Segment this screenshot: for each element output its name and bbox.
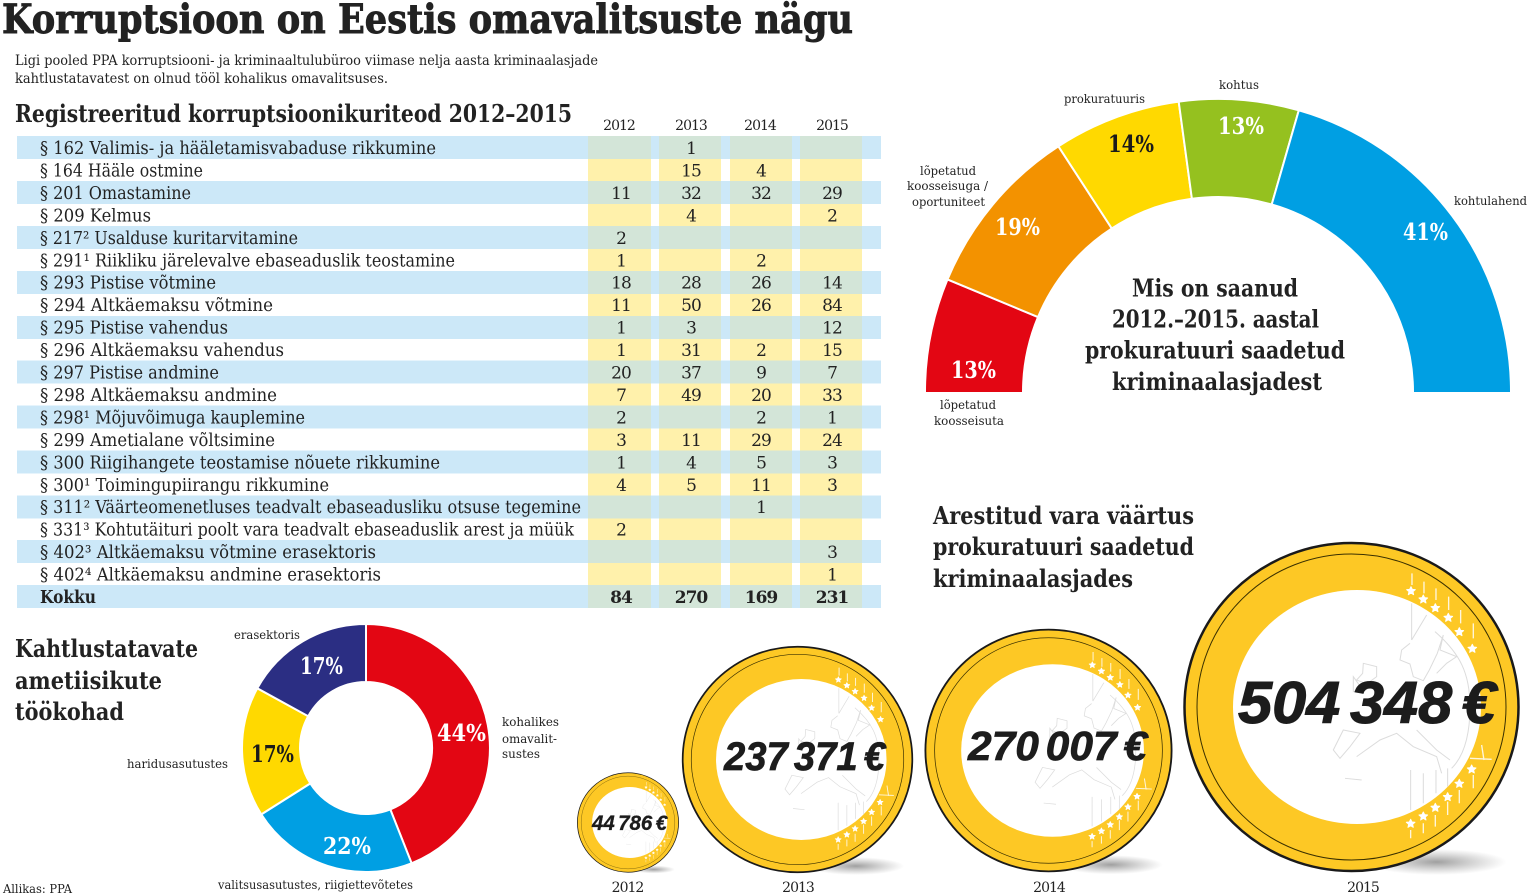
gauge centre heading bbox=[1085, 274, 1345, 396]
coin 2014: 270 007 € bbox=[967, 723, 1149, 769]
row 201: 32 bbox=[751, 184, 771, 204]
donut percentages: 17% bbox=[251, 741, 294, 768]
row 300: 4 bbox=[686, 453, 696, 473]
intro text: Ligi pooled PPA korruptsiooni- ja kriminaaltulubüroo viimase nelja aasta kriminaalasjade bbox=[15, 53, 598, 69]
row 297: 9 bbox=[756, 364, 766, 384]
row 299: 24 bbox=[822, 431, 842, 451]
row 402-4: 1 bbox=[827, 566, 837, 586]
row 300: 1 bbox=[616, 453, 626, 473]
gauge percentages: 13% bbox=[1218, 113, 1264, 140]
donut labels bbox=[127, 627, 559, 892]
coin 2013 bbox=[683, 647, 912, 894]
row 402-4 bbox=[40, 566, 837, 586]
row 293: 14 bbox=[822, 274, 842, 294]
row 402-3: 3 bbox=[827, 543, 837, 563]
row 209: 2 bbox=[827, 206, 837, 226]
row 298: § 298 Altkäemaksu andmine bbox=[40, 386, 277, 406]
donut heading: Kahtlustatavate bbox=[15, 634, 198, 663]
row 298-1: 1 bbox=[827, 408, 837, 428]
row 297: 20 bbox=[611, 364, 631, 384]
panel: workplaces donut bbox=[15, 624, 559, 892]
row 402-3 bbox=[40, 543, 837, 563]
row 209: § 209 Kelmus bbox=[40, 206, 151, 226]
row 295: 1 bbox=[616, 319, 626, 339]
gauge percentages: 41% bbox=[1403, 219, 1448, 246]
coins heading: kriminaalasjades bbox=[933, 564, 1133, 593]
row 297: 7 bbox=[827, 364, 837, 384]
donut heading bbox=[15, 634, 198, 726]
row 201: 11 bbox=[611, 184, 631, 204]
row 293: 28 bbox=[681, 274, 701, 294]
gauge segment: 14% yellow bbox=[1058, 102, 1192, 228]
row 300-1: 5 bbox=[686, 476, 696, 496]
gauge segment: 13% green bbox=[1179, 99, 1299, 204]
gauge centre heading: Mis on saanud bbox=[1132, 274, 1298, 302]
row 300 bbox=[40, 453, 837, 473]
year headers bbox=[603, 118, 848, 134]
row 311: 1 bbox=[756, 498, 766, 518]
row 300-1 bbox=[40, 476, 837, 496]
coin 2015: 504 348 € bbox=[1238, 670, 1498, 736]
donut labels: valitsusasutustes, riigiettevõtetes bbox=[217, 877, 413, 892]
row 201 bbox=[40, 184, 842, 204]
row 295: 3 bbox=[686, 319, 696, 339]
row 298: 33 bbox=[822, 386, 842, 406]
row 293 bbox=[40, 274, 842, 294]
row 217 bbox=[40, 229, 626, 249]
row 294 bbox=[40, 296, 842, 316]
panel: crimes table bbox=[15, 99, 881, 608]
row 162: 1 bbox=[686, 139, 696, 159]
row 298-1: 2 bbox=[756, 408, 766, 428]
row 296 bbox=[40, 341, 842, 361]
coins heading: prokuratuuri saadetud bbox=[933, 532, 1194, 561]
panel: seized assets coins bbox=[577, 501, 1518, 894]
gauge centre heading: kriminaalasjadest bbox=[1112, 367, 1322, 396]
row total: 84 bbox=[610, 588, 633, 608]
row 296: § 296 Altkäemaksu vahendus bbox=[40, 341, 284, 361]
row 164: 15 bbox=[681, 162, 701, 182]
row 402-4: § 402⁴ Altkäemaksu andmine erasektoris bbox=[40, 566, 381, 586]
coin 2012 bbox=[577, 773, 679, 894]
row 298: 7 bbox=[616, 386, 626, 406]
row 299: 11 bbox=[681, 431, 701, 451]
gauge percentages: 19% bbox=[995, 214, 1040, 241]
row 294: 26 bbox=[751, 296, 771, 316]
gauge labels: lõpetatud bbox=[940, 397, 996, 412]
donut labels: sustes bbox=[502, 746, 540, 761]
row 311: § 311² Väärteomenetluses teadvalt ebaseadusliku otsuse tegemine bbox=[40, 498, 581, 518]
donut heading: ametiisikute bbox=[15, 666, 162, 695]
row 294: 84 bbox=[822, 296, 842, 316]
gauge centre heading: 2012.–2015. aastal bbox=[1112, 304, 1319, 334]
coin 2014 bbox=[925, 630, 1172, 894]
row 299: § 299 Ametialane võltsimine bbox=[40, 431, 275, 451]
donut segment: 17% yellow bbox=[242, 688, 310, 814]
donut percentages bbox=[251, 653, 486, 860]
gauge labels: kohtus bbox=[1219, 77, 1259, 92]
row 209: 4 bbox=[686, 206, 696, 226]
row 201: § 201 Omastamine bbox=[40, 184, 191, 204]
row 298 bbox=[40, 386, 842, 406]
row 297 bbox=[40, 364, 837, 384]
coins heading: Arestitud vara väärtus bbox=[932, 501, 1194, 530]
row 296: 31 bbox=[681, 341, 701, 361]
gauge labels bbox=[907, 77, 1527, 428]
row total: Kokku bbox=[40, 588, 96, 608]
year headers: 2012 bbox=[603, 118, 635, 134]
row 300: § 300 Riigihangete teostamise nõuete rikkumine bbox=[40, 453, 440, 473]
row 209 bbox=[40, 206, 837, 226]
row 291 bbox=[40, 251, 766, 271]
row 291: § 291¹ Riikliku järelevalve ebaseaduslik teostamine bbox=[40, 251, 455, 271]
row 300-1: 11 bbox=[751, 476, 771, 496]
gauge segment: 19% orange bbox=[948, 146, 1112, 317]
row 293: 26 bbox=[751, 274, 771, 294]
year headers: 2013 bbox=[675, 118, 707, 134]
year headers: 2015 bbox=[816, 118, 848, 134]
row total: 231 bbox=[816, 588, 848, 608]
row 291: 1 bbox=[616, 251, 626, 271]
gauge labels: lõpetatud bbox=[920, 163, 976, 178]
row 296: 1 bbox=[616, 341, 626, 361]
row total bbox=[40, 588, 848, 608]
row 402-3: § 402³ Altkäemaksu võtmine erasektoris bbox=[40, 543, 376, 563]
coin 2013: 237 371 € bbox=[723, 735, 887, 779]
intro text bbox=[15, 53, 598, 87]
coin 2015 bbox=[1184, 543, 1518, 894]
gauge centre heading: prokuratuuri saadetud bbox=[1085, 336, 1345, 364]
row 299: 29 bbox=[751, 431, 771, 451]
row 201: 29 bbox=[822, 184, 842, 204]
row 300: 3 bbox=[827, 453, 837, 473]
donut labels: omavalit- bbox=[502, 731, 557, 746]
row 299: 3 bbox=[616, 431, 626, 451]
row 294: § 294 Altkäemaksu võtmine bbox=[40, 296, 273, 316]
row 296: 15 bbox=[822, 341, 842, 361]
row 293: § 293 Pistise võtmine bbox=[40, 274, 216, 294]
donut labels: erasektoris bbox=[234, 627, 300, 642]
panel: prosecution outcomes gauge bbox=[907, 77, 1527, 428]
row 298: 49 bbox=[681, 386, 701, 406]
gauge labels: prokuratuuris bbox=[1064, 91, 1145, 106]
row 300-1: § 300¹ Toimingupiirangu rikkumine bbox=[40, 476, 329, 496]
intro text: kahtlustatavatest on olnud tööl kohalikus omavalitsuses. bbox=[15, 71, 388, 87]
row 331: 2 bbox=[616, 521, 626, 541]
row 293: 18 bbox=[611, 274, 631, 294]
donut percentages: 22% bbox=[323, 833, 371, 860]
row total: 169 bbox=[745, 588, 777, 608]
donut segment: 22% blue bbox=[261, 783, 412, 872]
row 299 bbox=[40, 431, 842, 451]
row 300-1: 3 bbox=[827, 476, 837, 496]
donut percentages: 17% bbox=[300, 653, 343, 680]
donut segment: 17% navy bbox=[257, 624, 366, 716]
row 217: 2 bbox=[616, 229, 626, 249]
row 164: § 164 Hääle ostmine bbox=[40, 162, 203, 182]
row 294: 11 bbox=[611, 296, 631, 316]
row 295: 12 bbox=[822, 319, 842, 339]
gauge segment: 41% blue bbox=[1272, 110, 1511, 393]
row 201: 32 bbox=[681, 184, 701, 204]
gauge labels: koosseisuta bbox=[934, 413, 1005, 428]
row 164 bbox=[40, 162, 766, 182]
donut labels: kohalikes bbox=[502, 714, 559, 729]
row 162 bbox=[40, 139, 696, 159]
coin 2012: 44 786 € bbox=[591, 812, 668, 835]
row 291: 2 bbox=[756, 251, 766, 271]
row 295: § 295 Pistise vahendus bbox=[40, 319, 228, 339]
row 300-1: 4 bbox=[616, 476, 626, 496]
gauge labels: kohtulahend bbox=[1454, 193, 1527, 208]
row 300: 5 bbox=[756, 453, 766, 473]
row 162: § 162 Valimis- ja hääletamisvabaduse rikkumine bbox=[40, 139, 436, 159]
row 298-1: 2 bbox=[616, 408, 626, 428]
gauge labels: koosseisuga / bbox=[907, 178, 989, 193]
row 217: § 217² Usalduse kuritarvitamine bbox=[40, 229, 298, 249]
donut percentages: 44% bbox=[437, 720, 486, 747]
gauge percentages bbox=[951, 113, 1448, 384]
coins heading bbox=[932, 501, 1194, 593]
gauge segment: 13% red bbox=[925, 279, 1038, 393]
row 297: 37 bbox=[681, 364, 701, 384]
row 297: § 297 Pistise andmine bbox=[40, 364, 219, 384]
row 294: 50 bbox=[681, 296, 701, 316]
row 298: 20 bbox=[751, 386, 771, 406]
donut segment: 44% red bbox=[366, 624, 490, 863]
gauge percentages: 13% bbox=[951, 357, 996, 384]
row 298-1 bbox=[40, 408, 837, 428]
gauge percentages: 14% bbox=[1108, 131, 1154, 158]
row total: 270 bbox=[675, 588, 708, 608]
row 164: 4 bbox=[756, 162, 766, 182]
year headers: 2014 bbox=[744, 118, 777, 134]
row 298-1: § 298¹ Mõjuvõimuga kauplemine bbox=[40, 408, 305, 428]
row 296: 2 bbox=[756, 341, 766, 361]
row 331: § 331³ Kohtutäituri poolt vara teadvalt ebaseaduslik arest ja müük bbox=[40, 521, 574, 541]
table background stripes bbox=[17, 136, 881, 608]
row 295 bbox=[40, 319, 842, 339]
donut labels: haridusasutustes bbox=[127, 756, 228, 771]
table heading: Registreeritud korruptsioonikuriteod 2012–2015 bbox=[15, 99, 572, 128]
donut heading: töökohad bbox=[15, 697, 124, 726]
gauge labels: oportuniteet bbox=[912, 194, 985, 209]
